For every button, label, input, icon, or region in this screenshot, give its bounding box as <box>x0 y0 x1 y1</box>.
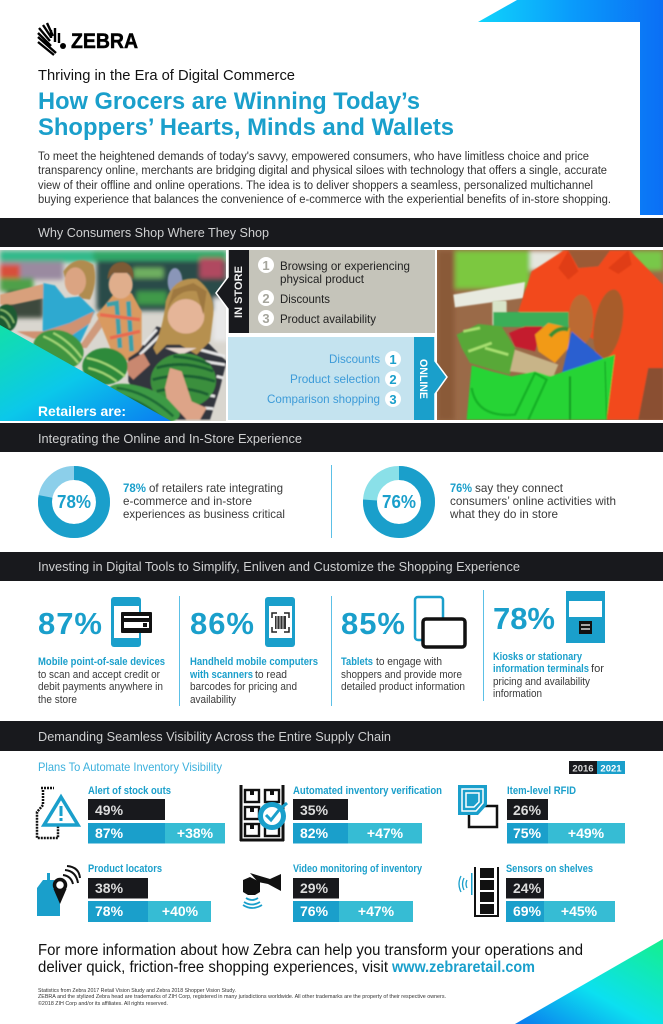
section header: integrating <box>0 423 663 452</box>
stat: 85% tablets: 85% <box>341 606 405 641</box>
icon: alert bottle <box>37 788 78 838</box>
panel: in store <box>216 250 435 333</box>
panel: online: 1 <box>389 352 397 367</box>
bars: automated inventory verification: 82% <box>300 825 329 841</box>
bars: video monitoring: +47% <box>358 903 395 919</box>
intro paragraph: view of their offline and online operations. The idea is to deliver shoppers a seamless, personalized multichannel <box>38 180 593 192</box>
stat: 78% kiosks: 78% <box>493 601 555 636</box>
stat: 87% mobile point-of-sale: the store <box>38 694 77 706</box>
stat: 86% handheld computers: with scanners <box>189 669 253 681</box>
stat: 85% tablets <box>341 606 465 693</box>
bars: item-level RFID: 26% <box>513 802 542 818</box>
stat: 86% handheld computers: to read <box>255 669 287 681</box>
photo: family choosing watermelons <box>0 248 228 430</box>
text: 78% critical: of retailers rate integrating <box>149 481 283 495</box>
bars: alert of stock outs: +38% <box>177 825 214 841</box>
bars: sensors on shelves: 69% <box>513 903 542 919</box>
panel: in store: Product availability <box>280 312 376 326</box>
call to action: For more information about how Zebra can help you transform your operations and <box>38 942 583 959</box>
call to action <box>38 942 583 976</box>
bottom right gradient triangle <box>515 939 663 1024</box>
stat: 78% kiosks: information <box>493 688 542 700</box>
bars: sensors on shelves: +45% <box>561 903 598 919</box>
bars: item-level RFID: +49% <box>568 825 605 841</box>
top right gradient corner <box>478 0 663 215</box>
stat: 87% mobile point-of-sale: to scan and accept credit or <box>38 669 160 681</box>
intro paragraph: transparency online, merchants are bridging digital and physical siloes with technology that offers a single, accurate <box>38 165 607 177</box>
panel: online: 3 <box>389 392 397 407</box>
stat: 87% mobile point-of-sale: debit payments anywhere in <box>38 681 163 693</box>
main heading: How Grocers are Winning Today’s <box>38 88 420 115</box>
main heading <box>38 88 454 141</box>
bars: product locators: +40% <box>162 903 199 919</box>
bars: automated inventory verification: Automated inventory verification <box>293 785 442 797</box>
bars: alert of stock outs <box>88 785 225 844</box>
panel: online: ONLINE <box>417 359 429 399</box>
subheading: plans to automate: Plans To Automate Inventory Visibility <box>38 760 222 774</box>
stat: 86% handheld computers: Handheld mobile computers <box>190 656 318 668</box>
Zebra logo <box>38 23 138 55</box>
main heading: Shoppers’ Hearts, Minds and Wallets <box>38 114 454 141</box>
stat: 85% tablets: Tablets <box>341 656 373 668</box>
stat: 78% kiosks: information terminals <box>493 663 589 675</box>
text: 76% connect <box>449 481 616 521</box>
section header: why consumers shop <box>0 218 663 247</box>
panel: in store: 3 <box>262 311 270 326</box>
panel: in store: Discounts <box>280 292 330 306</box>
stat: 85% tablets: shoppers and provide more <box>341 669 462 681</box>
bars: video monitoring <box>293 863 423 922</box>
icon: kiosk <box>566 591 605 643</box>
bars: product locators <box>88 863 211 922</box>
Zebra logo: ZEBRA <box>71 30 138 53</box>
text: 78% critical: e-commerce and in-store <box>123 494 252 508</box>
icon: phone and tablet <box>415 597 465 647</box>
bars: product locators: Product locators <box>88 863 162 875</box>
stat: 86% handheld computers: 86% <box>190 606 254 641</box>
stat: 78% kiosks: pricing and availability <box>493 676 590 688</box>
call to action: deliver quick, friction-free shopping experiences, visit <box>38 959 389 976</box>
footnotes: ©2018 ZIH Corp and/or its affiliates. All rights reserved. <box>38 1000 168 1007</box>
footnotes <box>38 988 446 1007</box>
donut chart: 78%: 78% <box>57 492 91 512</box>
text: 78% critical <box>123 481 285 521</box>
panel: in store: IN STORE <box>233 266 245 318</box>
section header: why consumers shop: Why Consumers Shop Where They Shop <box>38 225 269 240</box>
stat: 78% kiosks: for <box>591 663 604 675</box>
bars: product locators: 78% <box>95 903 124 919</box>
donut chart: 76%: 76% <box>382 492 416 512</box>
icon: shelf sensors <box>459 867 498 916</box>
panel: online: Comparison shopping <box>267 392 380 406</box>
legend: 2016 / 2021: 2021 <box>600 764 622 774</box>
intro paragraph: To meet the heightened demands of today's savvy, empowered consumers, who have limitless choice and price <box>38 151 589 163</box>
panel: online: 2 <box>389 372 397 387</box>
section header: investing: Investing in Digital Tools to Simplify, Enliven and Customize the Shopping Experience <box>38 559 520 574</box>
bars: video monitoring: Video monitoring of inventory <box>293 863 423 875</box>
donut chart: 76% <box>370 473 428 531</box>
legend: 2016 / 2021: 2016 <box>572 764 594 774</box>
bars: item-level RFID: Item-level RFID <box>507 785 576 797</box>
bars: automated inventory verification <box>293 785 442 844</box>
bars: automated inventory verification: 35% <box>300 802 329 818</box>
panel: in store: physical product <box>280 272 365 286</box>
panel: in store: Browsing or experiencing <box>280 259 410 273</box>
section header: demanding visibility <box>0 721 663 751</box>
subtitle: Thriving in the Era of Digital Commerce <box>38 67 295 84</box>
icon: RFID tag <box>458 785 497 827</box>
stat: 78% kiosks: Kiosks or stationary <box>493 651 583 663</box>
stat: 87% mobile point-of-sale: Mobile point-of-sale devices <box>38 656 165 668</box>
panel: online: Discounts <box>329 352 380 366</box>
section header: demanding visibility: Demanding Seamless Visibility Across the Entire Supply Chain <box>38 729 391 744</box>
bars: alert of stock outs: 49% <box>95 802 124 818</box>
intro paragraph <box>38 151 611 206</box>
bars: product locators: 38% <box>95 880 124 896</box>
text: 78% critical: experiences as business critical <box>123 507 285 521</box>
bars: item-level RFID <box>507 785 625 844</box>
legend: 2016 / 2021 <box>569 761 625 774</box>
icon: video camera <box>243 873 281 908</box>
bars: alert of stock outs: Alert of stock outs <box>88 785 171 797</box>
stat: 85% tablets: to engage with <box>376 656 442 668</box>
text: 76% connect: consumers’ online activities with <box>450 494 616 508</box>
stat: 87% mobile point-of-sale <box>38 606 165 706</box>
stat: 78% kiosks <box>493 601 604 700</box>
stat: 86% handheld computers: availability <box>190 694 236 706</box>
bars: sensors on shelves: Sensors on shelves <box>506 863 593 875</box>
gradient triangle with label <box>0 325 171 421</box>
call to action: www.zebraretail.com <box>391 959 535 976</box>
bars: automated inventory verification: +47% <box>367 825 404 841</box>
icon: tag with location pin <box>37 866 80 916</box>
footnotes: Statistics from Zebra 2017 Retail Vision Study and Zebra 2018 Shopper Vision Study. <box>38 988 236 994</box>
stat: 86% handheld computers: barcodes for pricing and <box>190 681 297 693</box>
bars: video monitoring: 29% <box>300 880 329 896</box>
footnotes: ZEBRA and the stylized Zebra head are trademarks of ZIH Corp, registered in many jurisdictions worldwide. All other trademarks are the property of their respective owners. <box>38 994 446 1000</box>
gradient triangle with label: Retailers are: <box>38 403 126 419</box>
intro paragraph: buying experience that balances the convenience of e-commerce with the experiential benefits of in-store shopping. <box>38 194 611 206</box>
icon: shelves with check <box>240 785 287 841</box>
section header: integrating: Integrating the Online and In-Store Experience <box>38 431 302 446</box>
bars: video monitoring: 76% <box>300 903 329 919</box>
stat: 87% mobile point-of-sale: 87% <box>38 606 102 641</box>
panel: in store: 2 <box>262 291 270 306</box>
panel: online <box>228 337 447 420</box>
text: 76% connect: 76% <box>450 481 472 495</box>
photo: man holding green grocery bag <box>435 248 663 423</box>
text: 78% critical: 78% <box>123 481 146 495</box>
stat: 86% handheld computers <box>189 606 318 706</box>
bars: item-level RFID: 75% <box>513 825 542 841</box>
bars: sensors on shelves <box>506 863 615 922</box>
donut chart: 78% <box>45 473 103 531</box>
section header: investing <box>0 552 663 581</box>
panel: online: Product selection <box>290 372 380 386</box>
text: 76% connect: say they connect <box>475 481 564 495</box>
bars: sensors on shelves: 24% <box>513 880 542 896</box>
text: 76% connect: what they do in store <box>449 507 558 521</box>
stat: 85% tablets: detailed product information <box>341 681 465 693</box>
bars: alert of stock outs: 87% <box>95 825 124 841</box>
icon: phone with card <box>111 597 152 647</box>
panel: in store: 1 <box>262 258 270 273</box>
icon: phone with barcode <box>265 597 295 647</box>
